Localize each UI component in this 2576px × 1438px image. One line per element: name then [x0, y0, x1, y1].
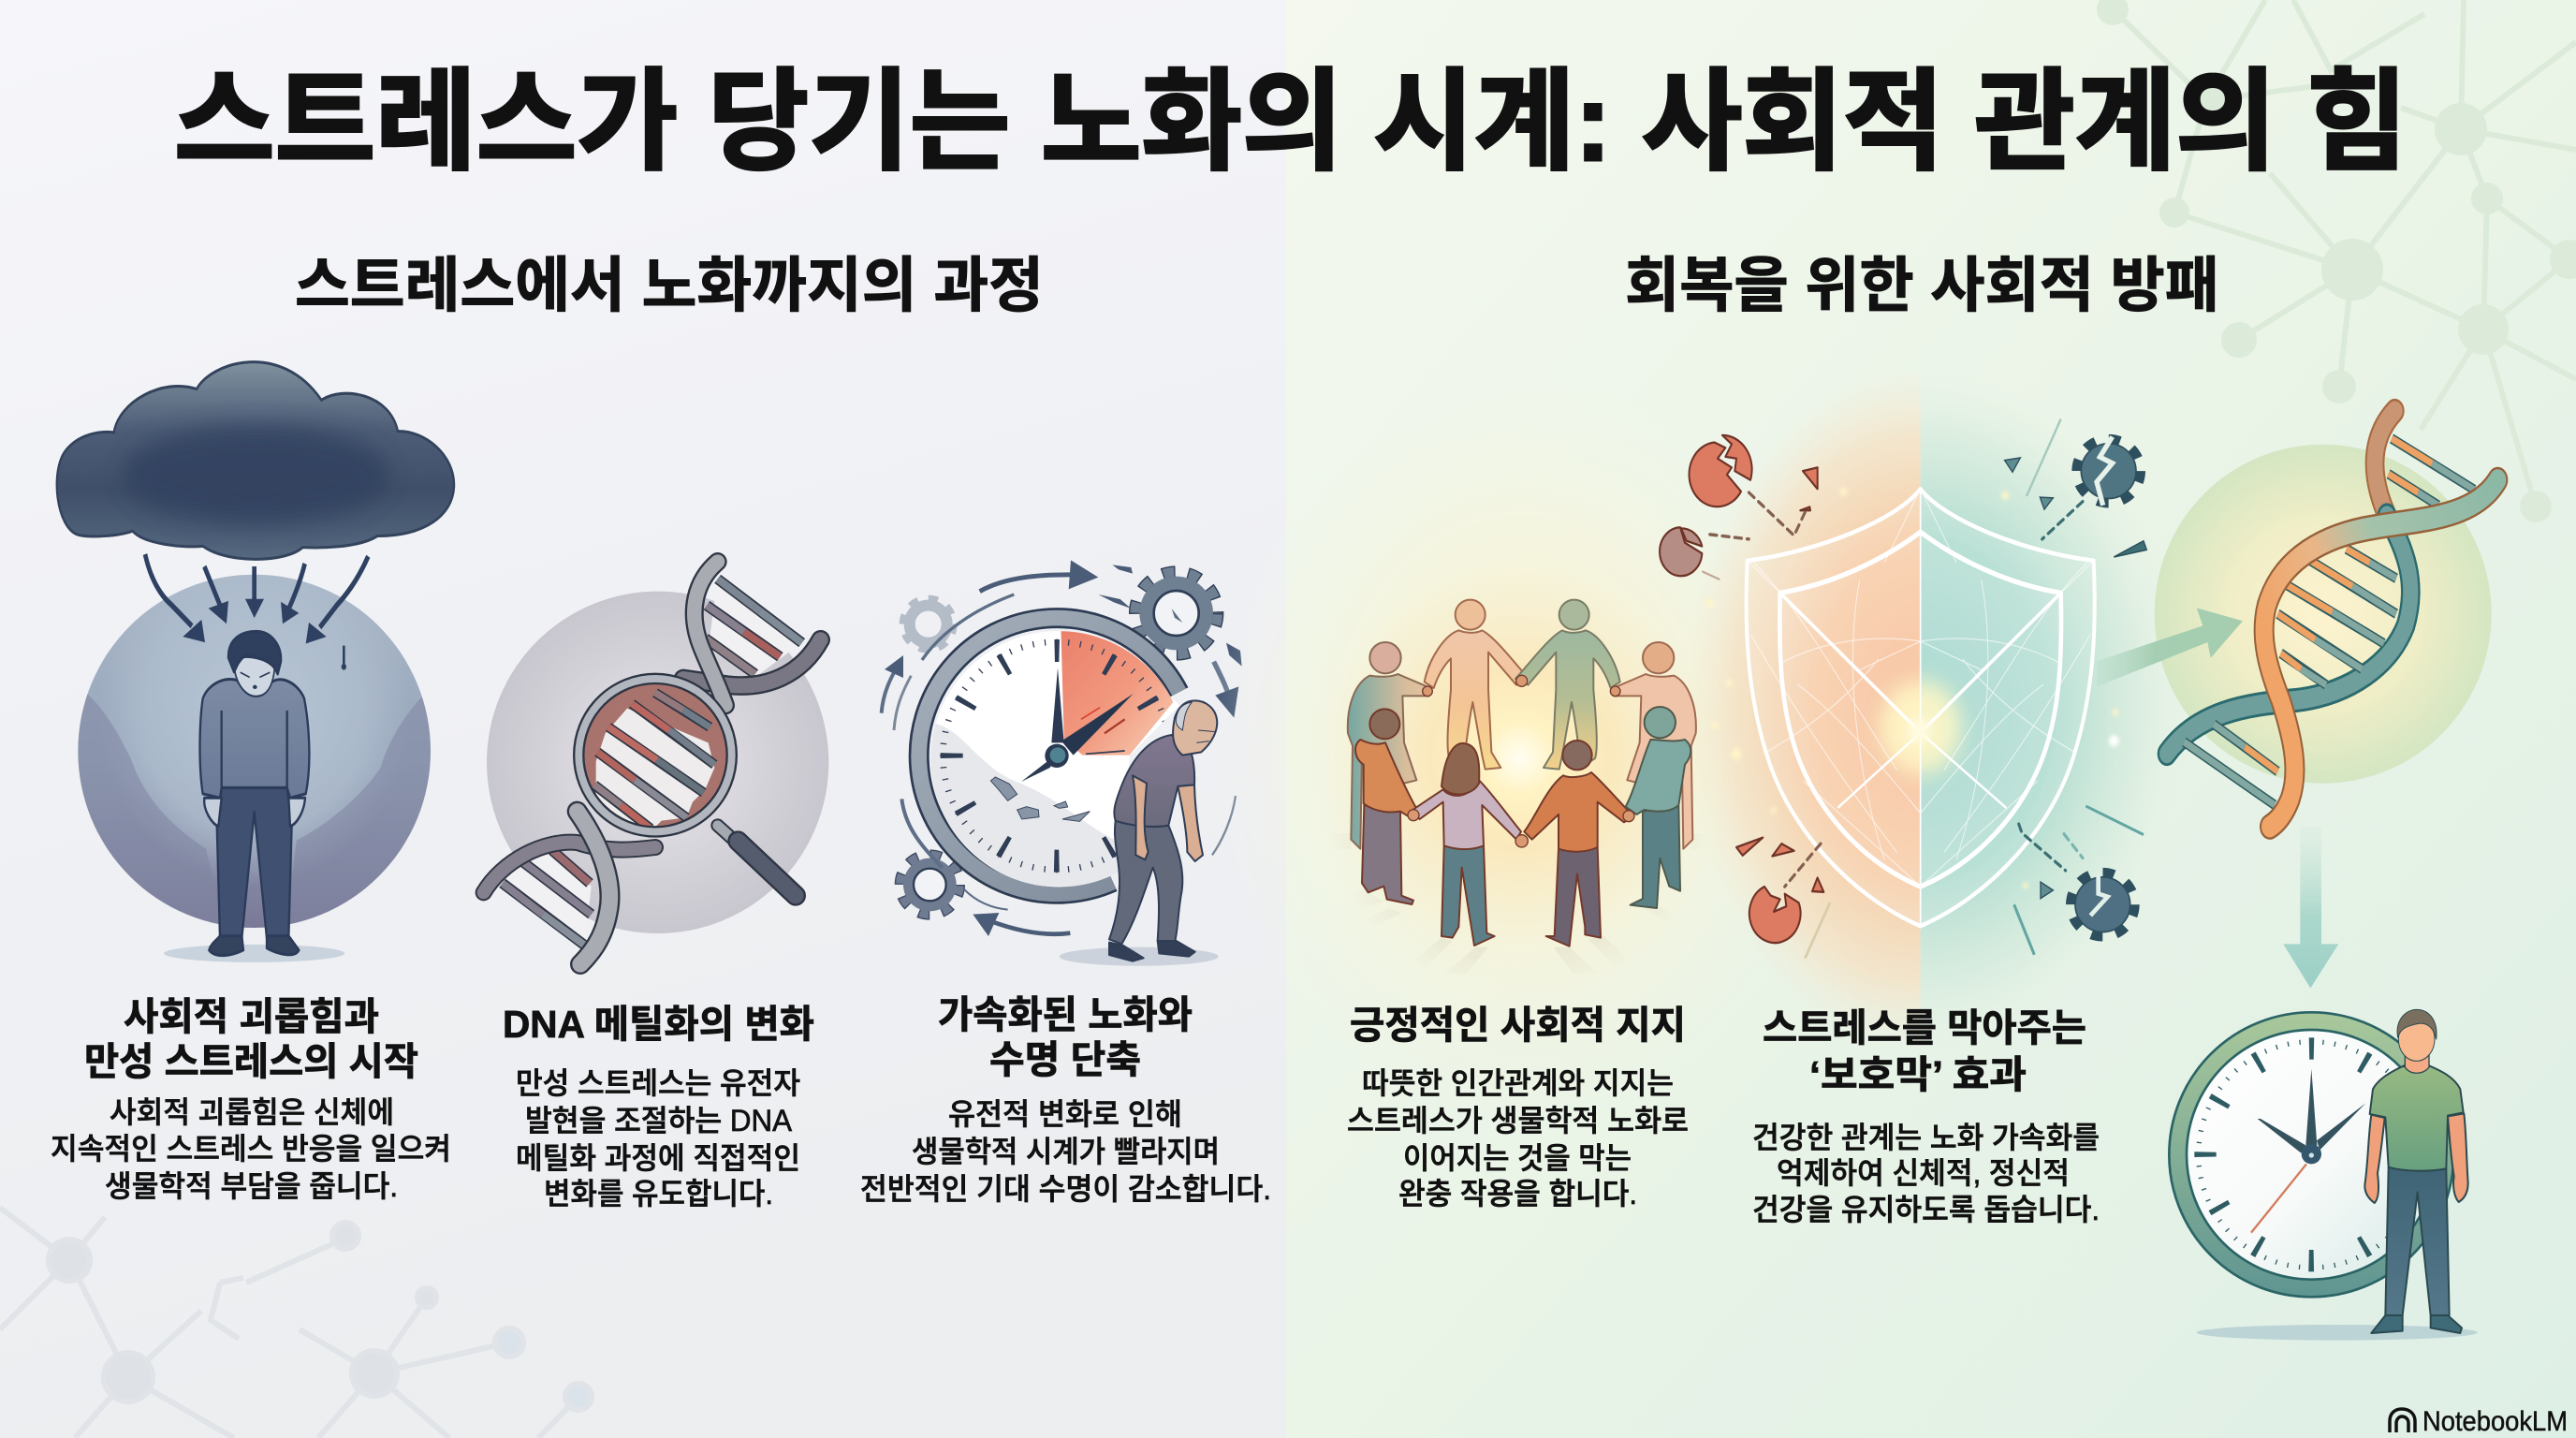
step 5 body: [1752, 1121, 2100, 1226]
background: left panel: [0, 0, 1286, 1438]
orb behind DNA: [487, 592, 828, 933]
step 2 body: 발현을 조절하는 DNA: [525, 1104, 793, 1137]
front row people: [1355, 707, 1690, 946]
arrow from DNA to clock: [2283, 827, 2338, 989]
back strand: [2167, 411, 2410, 754]
step 5 heading: ‘보호막’ 효과: [1809, 1053, 2027, 1096]
step 2 text: DNA methylation: [503, 1003, 814, 1211]
step 3 body: 전반적인 기대 수명이 감소합니다.: [860, 1172, 1271, 1206]
decorative network: bottom left: [0, 1208, 592, 1438]
clock hands: [1021, 668, 1134, 782]
man: [2364, 1009, 2468, 1333]
faded gear: [903, 599, 953, 649]
back person right side: [1613, 642, 1696, 849]
step 3 body: [860, 1097, 1271, 1206]
motion arrows: [882, 560, 1242, 936]
step 1 body: 지속적인 스트레스 반응을 일으켜: [51, 1132, 451, 1166]
decorative network: top right: [2100, 0, 2576, 520]
icon: glowing shield with deflected stressors: [1660, 419, 2146, 959]
heading: left section: 스트레스에서 노화까지의 과정: [295, 252, 1044, 319]
DNA rungs top and bottom: [503, 579, 802, 946]
old man: [1109, 700, 1217, 961]
clasped hands: [1408, 675, 1634, 847]
step 4 heading: 긍정적인 사회적 지지: [1350, 1004, 1686, 1047]
step 4 body: 따뜻한 인간관계와 지지는: [1362, 1066, 1674, 1100]
step 3 text: accelerated aging: [860, 993, 1271, 1206]
step 2 body: 변화를 유도합니다.: [544, 1177, 773, 1211]
shield glow backdrop: [1683, 369, 2186, 1049]
step 2 heading: DNA 메틸화의 변화: [503, 1003, 814, 1046]
step 5 body: 건강을 유지하도록 돕습니다.: [1752, 1193, 2100, 1226]
clock hands: [2251, 1069, 2365, 1233]
icon: NotebookLM mark: [2390, 1409, 2415, 1432]
step 1 heading: 사회적 괴롭힘과: [124, 995, 379, 1038]
front person left: [1355, 709, 1418, 904]
stress arrows: [145, 554, 368, 670]
step 4 text: social support: [1347, 1004, 1689, 1211]
step 1 body: 사회적 괴롭힘은 신체에: [110, 1095, 394, 1129]
step 1 heading: 만성 스트레스의 시작: [84, 1040, 418, 1083]
step 3 body: 유전적 변화로 인해: [948, 1097, 1182, 1131]
icon: healthy DNA: [2097, 411, 2497, 989]
step 5 text: protective effect: [1752, 1006, 2100, 1226]
step 5 body: 억제하여 신체적, 정신적: [1777, 1156, 2070, 1190]
step 1 body: 생물학적 부담을 줍니다.: [105, 1169, 398, 1203]
bottom left gear: [900, 855, 959, 915]
white base between rungs: [503, 578, 802, 946]
broken gears: [2071, 436, 2140, 936]
ground shadow: [1060, 947, 1219, 966]
orb behind person: [78, 544, 432, 930]
icon: healthy clock and man: [2169, 1009, 2478, 1341]
back person centre right: [1515, 600, 1620, 770]
step 1 heading: [84, 995, 418, 1083]
step 5 heading: [1763, 1006, 2086, 1096]
person: [200, 631, 309, 956]
front person right: [1626, 707, 1690, 908]
back person left side: [1348, 642, 1430, 849]
cream glow on right panel: [1217, 374, 1835, 1123]
step 2 body: [516, 1066, 800, 1211]
magnifier lens: [574, 674, 737, 836]
step 2 body: 메틸화 과정에 직접적인: [516, 1141, 800, 1175]
arrow from shield to DNA: [2097, 608, 2243, 687]
clock face: [929, 624, 1179, 887]
ground shadow: [2197, 1325, 2478, 1341]
cloud: [57, 362, 454, 559]
shield: [1747, 489, 2095, 926]
warm glow: [1320, 559, 1720, 958]
title: 스트레스가 당기는 노화의 시계: 사회적 관계의 힘: [174, 61, 2408, 184]
step 1 body: [51, 1095, 451, 1203]
front strand: [2264, 480, 2497, 827]
step 4 body: [1347, 1066, 1689, 1211]
dashed trajectories: [1710, 492, 2083, 887]
DNA strands: [484, 562, 821, 964]
clock ring: [2169, 1012, 2453, 1297]
clock ring: [919, 618, 1179, 894]
top right gear: [1134, 572, 1218, 654]
icon: stressed person under cloud: [57, 362, 454, 962]
back row people: [1348, 600, 1696, 849]
sparkles: [1706, 487, 2119, 888]
step 2 body: 만성 스트레스는 유전자: [516, 1066, 800, 1100]
step 4 body: 완충 작용을 합니다.: [1398, 1177, 1637, 1211]
icon: circle of people holding hands: [1320, 559, 1741, 974]
step 4 body: 이어지는 것을 막는: [1403, 1141, 1632, 1175]
background: right panel: [1286, 0, 2576, 1438]
icon: DNA with magnifying glass: [484, 562, 828, 964]
clock face: [2187, 1030, 2437, 1280]
back person centre left: [1425, 600, 1529, 770]
step 3 heading: 가속화된 노화와: [938, 993, 1193, 1036]
heading: right section: 회복을 위한 사회적 방패: [1625, 252, 2219, 319]
step 1 text: social isolation: [51, 995, 451, 1203]
NotebookLM logo: [2390, 1406, 2568, 1437]
broken circles: [1660, 435, 1823, 943]
rungs: [2184, 438, 2474, 805]
shards and streaks: [1702, 419, 2146, 959]
clock cracks: [990, 777, 1090, 821]
red elapsed sector: [1061, 624, 1173, 756]
front person right of centre: [1524, 741, 1633, 946]
step 3 heading: [938, 993, 1193, 1081]
step 5 body: 건강한 관계는 노화 가속화를: [1752, 1121, 2100, 1154]
ground shadow: [164, 945, 344, 962]
step 3 body: 생물학적 시계가 빨라지며: [912, 1135, 1220, 1168]
magnifier handle: [718, 826, 796, 896]
front person left of centre: [1411, 743, 1521, 946]
icon: accelerated clock and old man: [882, 560, 1242, 966]
ground rays: [1329, 833, 1741, 974]
step 3 heading: 수명 단축: [989, 1038, 1141, 1081]
step 4 body: 스트레스가 생물학적 노화로: [1347, 1104, 1689, 1137]
orb behind DNA: [2155, 445, 2492, 784]
step 5 heading: 스트레스를 막아주는: [1763, 1006, 2086, 1049]
